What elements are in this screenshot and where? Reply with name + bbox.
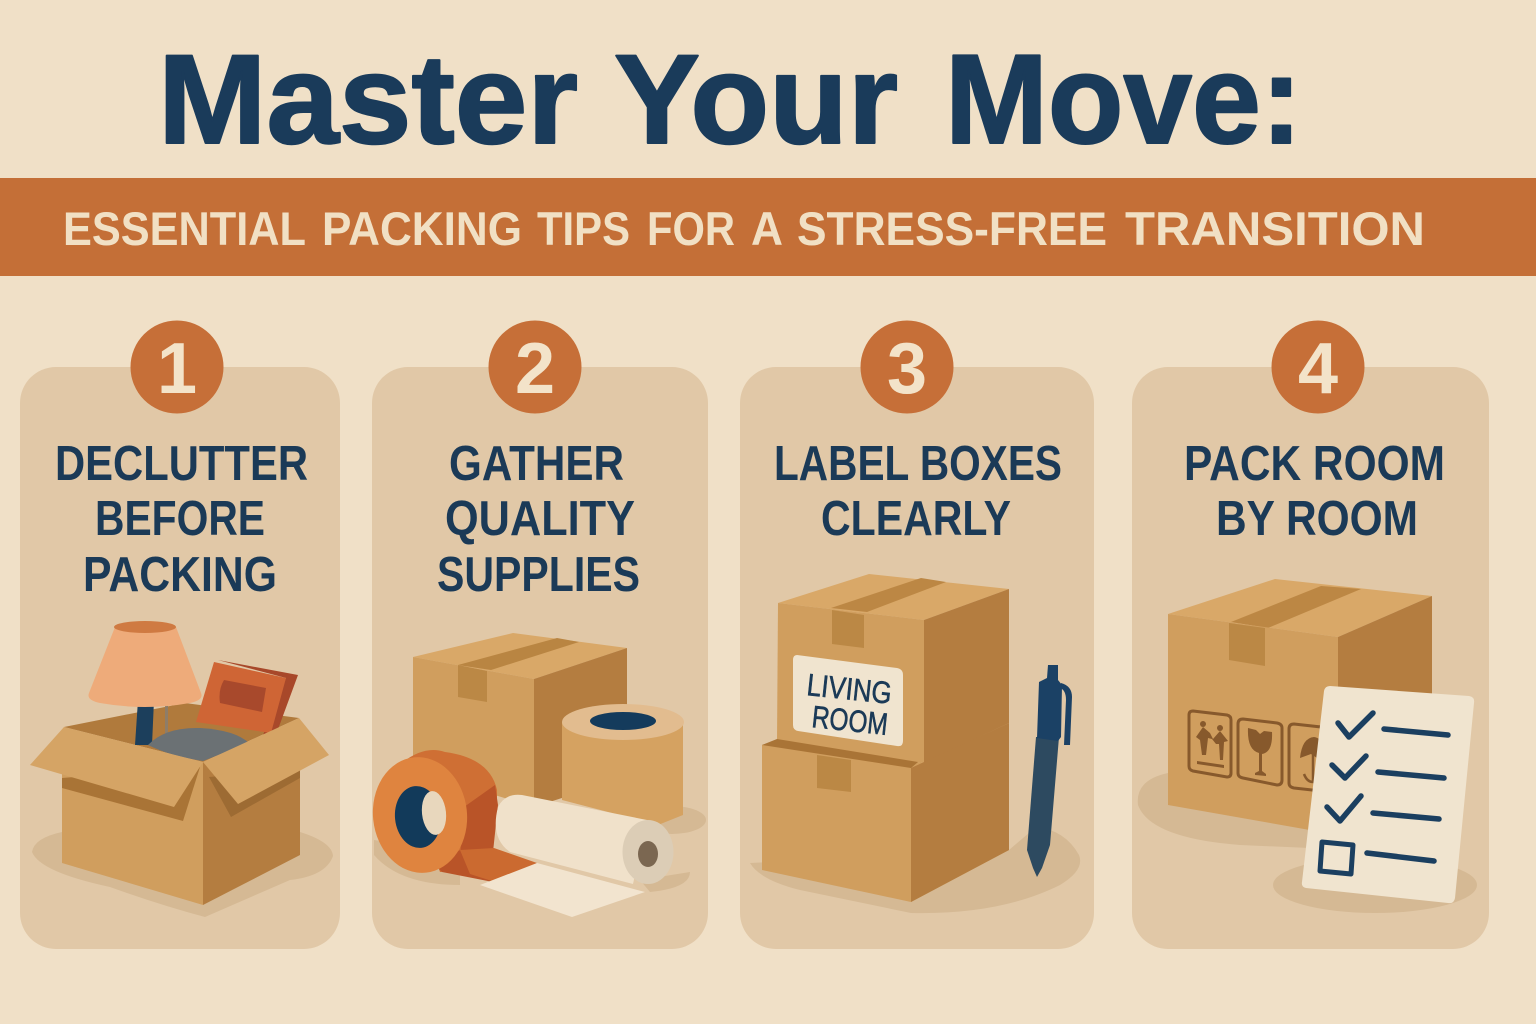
heading: pack room by room xyxy=(1184,437,1445,546)
panel: step 1 declutter xyxy=(20,320,340,949)
label: living room xyxy=(793,655,903,746)
heading: declutter before packing xyxy=(55,437,308,602)
icon: handling symbols xyxy=(1189,711,1330,792)
step number 4: 4 xyxy=(1298,329,1338,409)
subtitle banner: A xyxy=(751,202,783,255)
panel: step 3 label boxes xyxy=(740,320,1094,949)
heading: gather quality supplies xyxy=(437,437,640,602)
heading: declutter before packing: BEFORE xyxy=(95,492,265,546)
heading: label boxes clearly: LABEL BOXES xyxy=(774,437,1062,491)
illustration: box, tape rolls and paper xyxy=(367,633,706,917)
heading: gather quality supplies: GATHER xyxy=(449,437,624,491)
panel: step 2 gather supplies xyxy=(367,320,708,949)
step number 2: 2 xyxy=(515,329,555,409)
icon: orange tape roll xyxy=(367,750,537,883)
illustration: stacked labelled boxes and pen xyxy=(750,574,1080,913)
step number 3 xyxy=(860,320,954,414)
panel: step 4 pack room by room xyxy=(1132,320,1489,949)
title xyxy=(158,28,1302,170)
heading: declutter before packing: PACKING xyxy=(83,548,277,602)
illustration: box with checklist xyxy=(1138,579,1477,913)
subtitle banner: PACKING xyxy=(322,202,522,255)
subtitle banner: STRESS-FREE xyxy=(797,202,1107,255)
subtitle banner: FOR xyxy=(647,202,735,255)
title: Move: xyxy=(945,28,1302,170)
heading: label boxes clearly: CLEARLY xyxy=(821,492,1011,546)
label: living room: ROOM xyxy=(810,699,890,742)
heading: label boxes clearly xyxy=(774,437,1062,546)
step number 3: 3 xyxy=(887,329,927,409)
step number 2 xyxy=(488,320,582,414)
label: living room: LIVING xyxy=(805,667,893,711)
subtitle banner: TIPS xyxy=(537,202,630,255)
icon: checklist xyxy=(1302,686,1474,903)
heading: pack room by room: PACK ROOM xyxy=(1184,437,1445,491)
step number 1: 1 xyxy=(157,329,197,409)
subtitle banner xyxy=(0,178,1536,276)
heading: gather quality supplies: SUPPLIES xyxy=(437,548,640,602)
subtitle banner: ESSENTIAL xyxy=(63,202,306,255)
step number 1 xyxy=(130,320,224,414)
title: Your xyxy=(614,28,898,170)
icon: pen xyxy=(1027,665,1072,877)
illustration: open box with lamp and book xyxy=(30,621,333,917)
subtitle banner: TRANSITION xyxy=(1125,202,1425,255)
heading: gather quality supplies: QUALITY xyxy=(445,492,635,546)
step number 4 xyxy=(1272,320,1364,414)
heading: declutter before packing: DECLUTTER xyxy=(55,437,308,491)
heading: pack room by room: BY ROOM xyxy=(1216,492,1418,546)
title: Master xyxy=(158,28,578,170)
